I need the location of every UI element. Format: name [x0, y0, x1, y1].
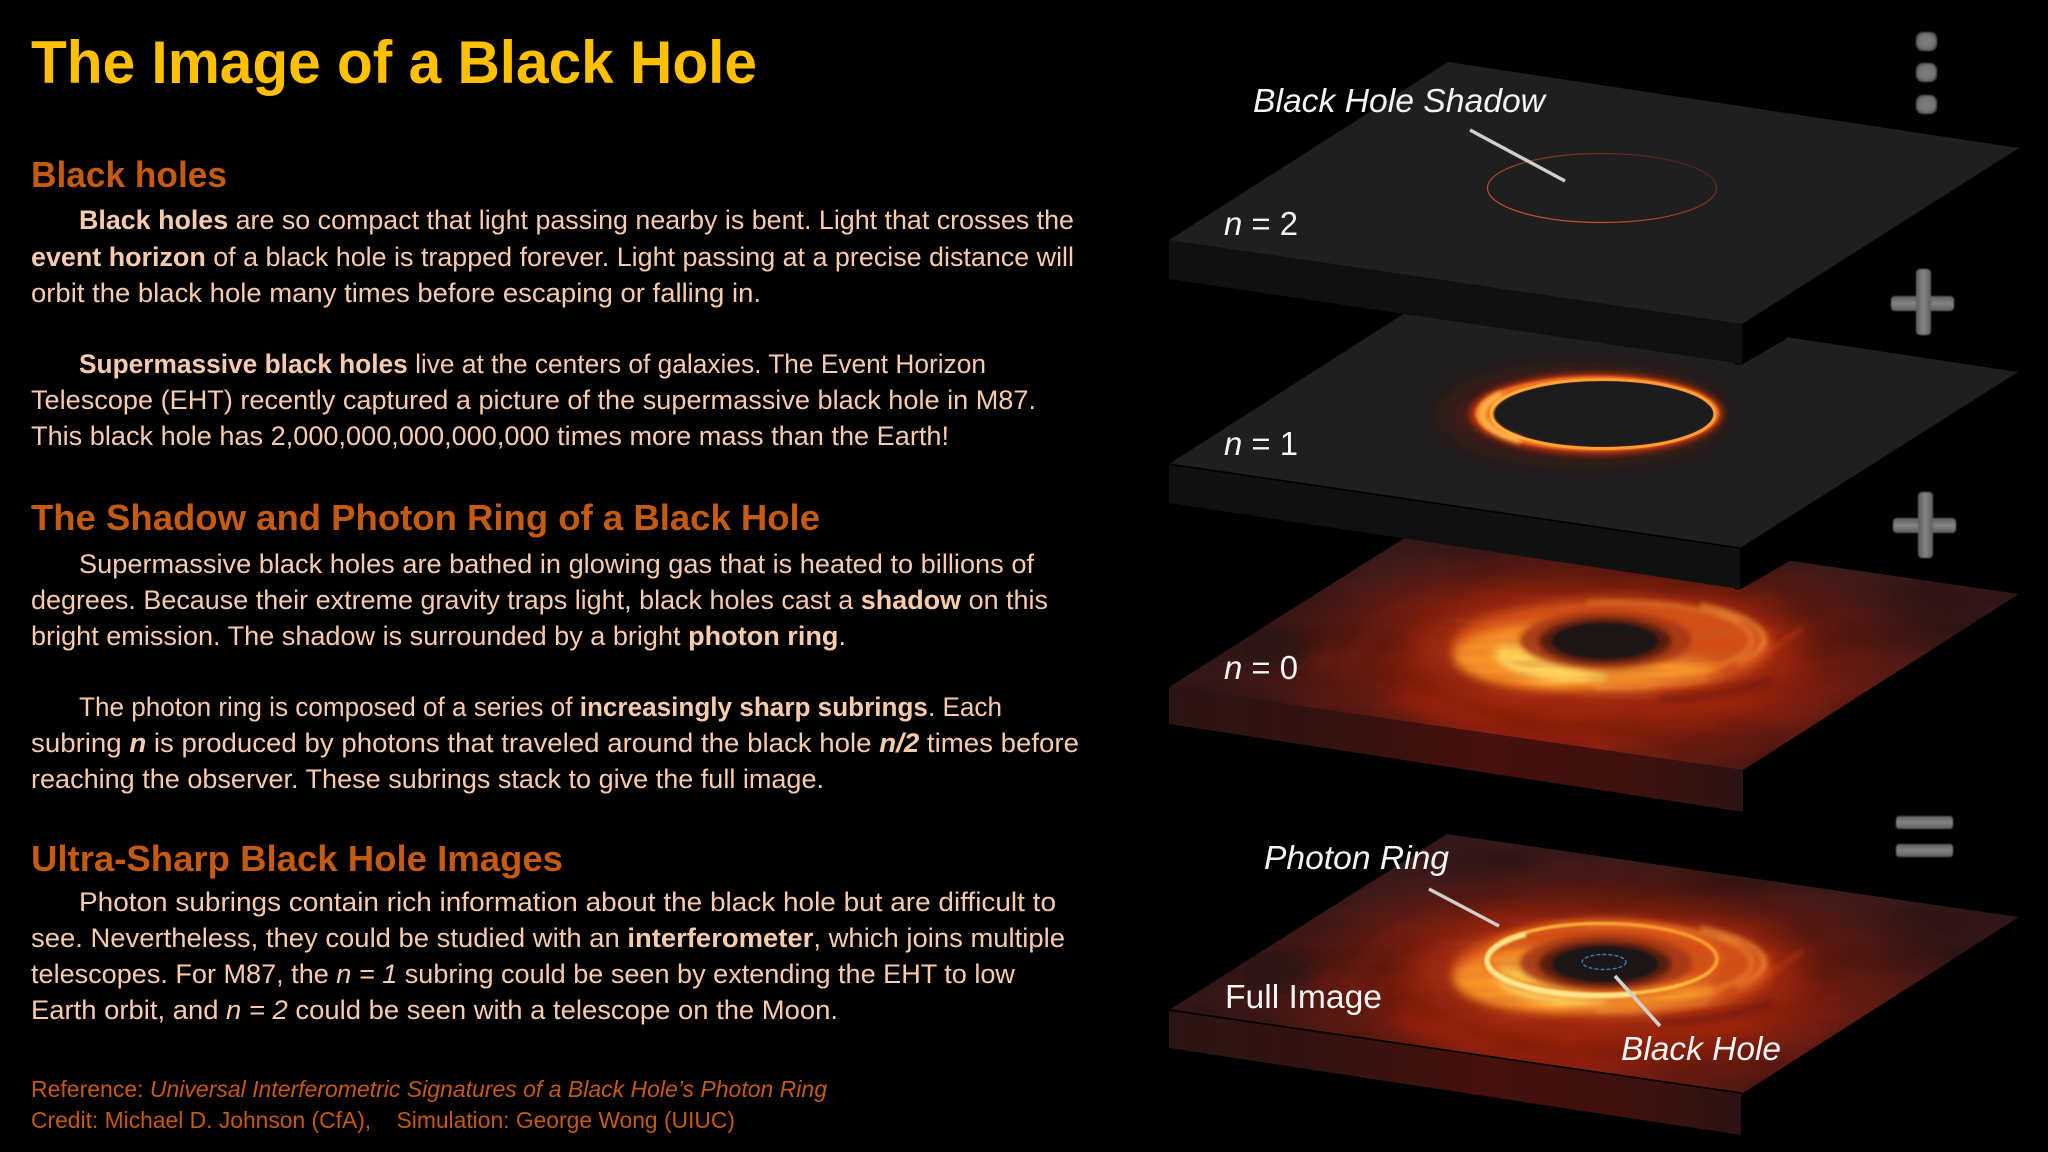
text block: shadow paragraph 1: bright emission. The shadow is surrounded by a bright photon ring.: [31, 621, 846, 651]
text block: shadow paragraph 2: reaching the observer. These subrings stack to give the full image.: [31, 764, 824, 794]
text block: shadow paragraph 2: subring n is produced by photons that traveled around the black hole n/2 times before: [31, 728, 1079, 758]
label: n = 1: n = 1: [1224, 425, 1298, 462]
text block: shadow paragraph 1: [31, 549, 1048, 651]
icon: plus: [1891, 269, 1954, 335]
heading: shadow and photon ring: The Shadow and Photon Ring of a Black Hole: [31, 497, 820, 538]
n = 2 slab top: [1169, 62, 2019, 324]
text block: black holes paragraph 2: This black hole has 2,000,000,000,000,000 times more mass than the Earth!: [31, 421, 949, 451]
label: black hole shadow: [1253, 82, 1565, 181]
label: black hole shadow: Black Hole Shadow: [1253, 82, 1547, 119]
panel: n = 1 layer: [1169, 286, 2018, 589]
text block: ultra-sharp paragraph: telescopes. For M87, the n = 1 subring could be seen by extending the EHT to low: [31, 959, 1016, 989]
text block: shadow paragraph 1: degrees. Because their extreme gravity traps light, black holes cast a shadow on this: [31, 585, 1048, 615]
icon: ellipsis dots: [1916, 32, 1937, 114]
black hole dashed outline: [1582, 954, 1626, 970]
text block: black holes paragraph 1: [31, 205, 1074, 308]
reference and credit: Credit: Michael D. Johnson (CfA), Simulation: George Wong (UIUC): [31, 1107, 735, 1133]
text block: black holes paragraph 1: event horizon of a black hole is trapped forever. Light passing at a precise distance will: [31, 242, 1074, 272]
label: photon ring: [1264, 839, 1499, 926]
text block: shadow paragraph 2: The photon ring is composed of a series of increasingly sharp subrings. Each: [79, 692, 1002, 722]
plane edge: [1169, 464, 1740, 548]
text block: black holes paragraph 2: Supermassive black holes live at the centers of galaxies. The Event Horizon: [79, 349, 986, 379]
n = 1 slab top: [1169, 286, 2018, 548]
plane edge: [1169, 1010, 1741, 1093]
full image slab side: [1169, 1010, 1741, 1135]
text block: black holes paragraph 2: [31, 349, 1036, 451]
gap notch above n = 1: [1735, 322, 1788, 364]
text block: ultra-sharp paragraph: see. Nevertheless, they could be studied with an interferometer, which joins multiple: [31, 923, 1065, 953]
text block: ultra-sharp paragraph: Photon subrings contain rich information about the black hole but are difficult to: [79, 887, 1056, 917]
text block: shadow paragraph 1: Supermassive black holes are bathed in glowing gas that is heated to billions of: [79, 549, 1035, 579]
panel: n = 0 layer: [1169, 511, 2019, 820]
photon ring on full image: [1486, 923, 1718, 996]
heading: black holes: Black holes: [31, 154, 227, 195]
label: black hole: [1615, 976, 1781, 1067]
panel: n = 2 layer: [1169, 62, 2019, 364]
panel: full image layer: [1169, 834, 2019, 1143]
reference and credit: Reference: Universal Interferometric Signatures of a Black Hole’s Photon Ring: [31, 1076, 827, 1102]
full image disk: [1169, 834, 2019, 1143]
n = 1 slab side: [1169, 464, 1740, 589]
n = 2 slab side: [1169, 240, 1742, 364]
title: The Image of a Black Hole: [31, 29, 757, 96]
text block: ultra-sharp paragraph: [31, 887, 1065, 1025]
label: n = 2: n = 2: [1224, 205, 1298, 242]
icon: plus: [1893, 492, 1956, 558]
label: full image: Full Image: [1225, 978, 1382, 1015]
gap notch above n = 0: [1735, 545, 1790, 590]
text block: black holes paragraph 1: Black holes are so compact that light passing nearby is bent. Light that crosses the: [79, 205, 1074, 235]
text block: ultra-sharp paragraph: Earth orbit, and n = 2 could be seen with a telescope on the Moon.: [31, 995, 838, 1025]
label: photon ring: Photon Ring: [1264, 839, 1450, 876]
icon: equals: [1896, 816, 1953, 857]
n = 1 ring: [1442, 371, 1723, 459]
n = 0 slab side: [1169, 687, 1743, 812]
label: n = 0: n = 0: [1224, 649, 1298, 686]
reference and credit: [31, 1076, 827, 1133]
text block: shadow paragraph 2: [31, 692, 1079, 794]
text block: black holes paragraph 1: orbit the black hole many times before escaping or falling in.: [31, 278, 761, 308]
label: black hole: Black Hole: [1621, 1030, 1781, 1067]
n = 2 ring: [1488, 154, 1716, 222]
text block: black holes paragraph 2: Telescope (EHT) recently captured a picture of the supermassive black hole in M87.: [31, 385, 1036, 415]
n = 0 disk: [1169, 511, 2019, 820]
heading: ultra-sharp images: Ultra-Sharp Black Hole Images: [31, 838, 563, 879]
